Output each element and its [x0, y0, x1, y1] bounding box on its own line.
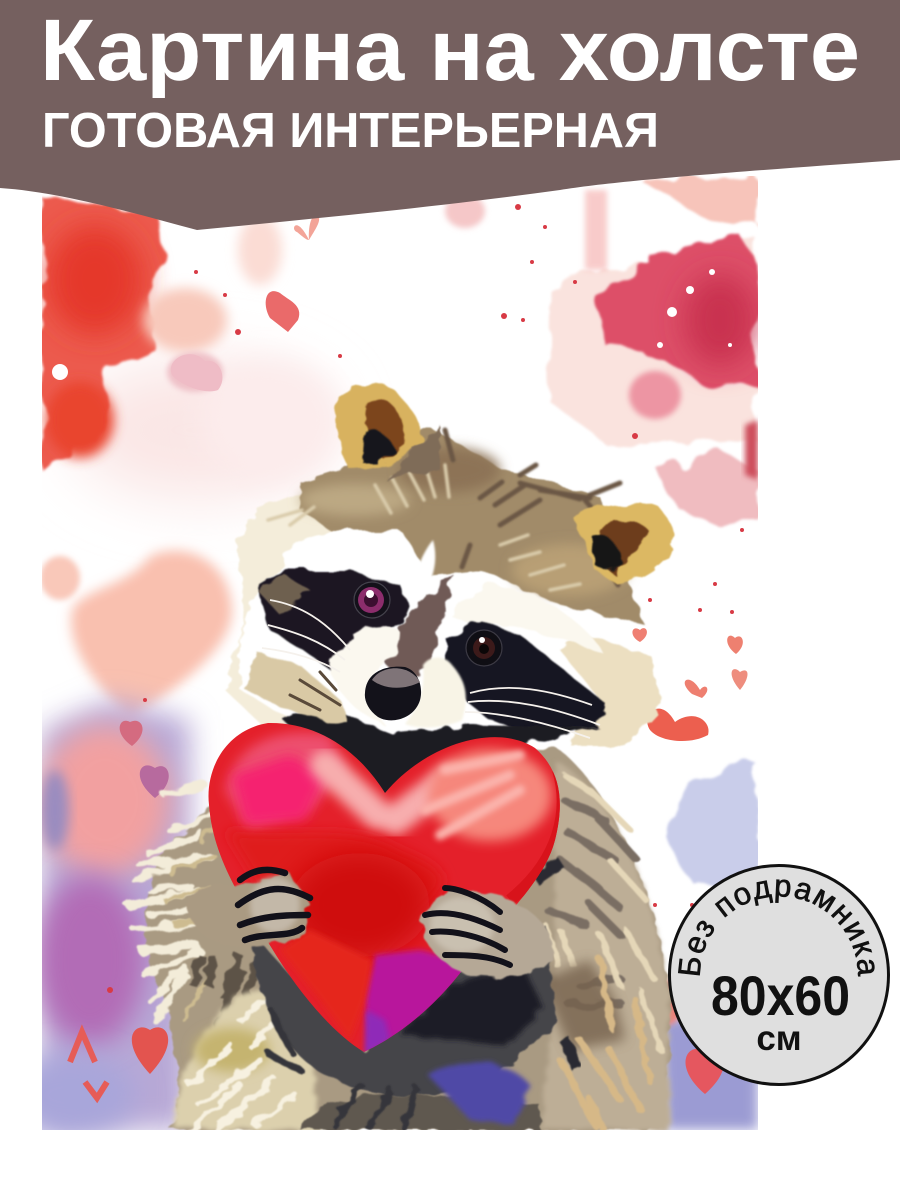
- white brow patches: [285, 532, 605, 655]
- big red heart: [208, 723, 563, 1056]
- eye mask left: [257, 570, 408, 672]
- right paw claws: [425, 888, 510, 965]
- painting: raccoon with heart: [5, 176, 758, 1137]
- watercolor background: [5, 176, 758, 1137]
- eye mask right: [447, 620, 605, 735]
- left fur strokes: [128, 785, 210, 1020]
- left paw: [187, 870, 310, 947]
- head crown: [300, 427, 645, 625]
- body base: [146, 750, 669, 1130]
- badge size: 80х60: [711, 964, 850, 1027]
- badge arc text: Без подрамника: [678, 879, 875, 977]
- eye left: [354, 582, 390, 618]
- subtitle: ГОТОВАЯ ИНТЕРЬЕРНАЯ: [42, 104, 659, 158]
- right paw: [422, 888, 552, 977]
- muzzle right: [405, 658, 466, 727]
- dark belly: [250, 925, 555, 1095]
- badge unit: см: [756, 1019, 802, 1058]
- muzzle left: [330, 627, 400, 725]
- size badge: [668, 864, 890, 1086]
- small hearts and splatter: [52, 204, 748, 1098]
- eye right: [466, 630, 502, 666]
- lower belly strokes: [300, 1094, 540, 1130]
- header banner: [0, 0, 900, 230]
- left cheek tan: [245, 650, 350, 725]
- raccoon body: [128, 750, 670, 1130]
- raccoon head: [225, 384, 672, 800]
- left paw claws: [238, 870, 310, 940]
- nose: [365, 667, 421, 720]
- crown strokes: [268, 465, 580, 590]
- head cream fringe: [225, 495, 332, 724]
- central stripe: [385, 575, 455, 677]
- heart brushwork: [225, 732, 563, 1056]
- whiskers: [262, 600, 600, 738]
- right fur: [540, 760, 670, 1130]
- ear left: [335, 384, 440, 480]
- chin dark: [281, 712, 601, 793]
- title: Картина на холсте: [40, 2, 860, 99]
- lower left fur: [174, 992, 320, 1130]
- ear right: [573, 503, 672, 585]
